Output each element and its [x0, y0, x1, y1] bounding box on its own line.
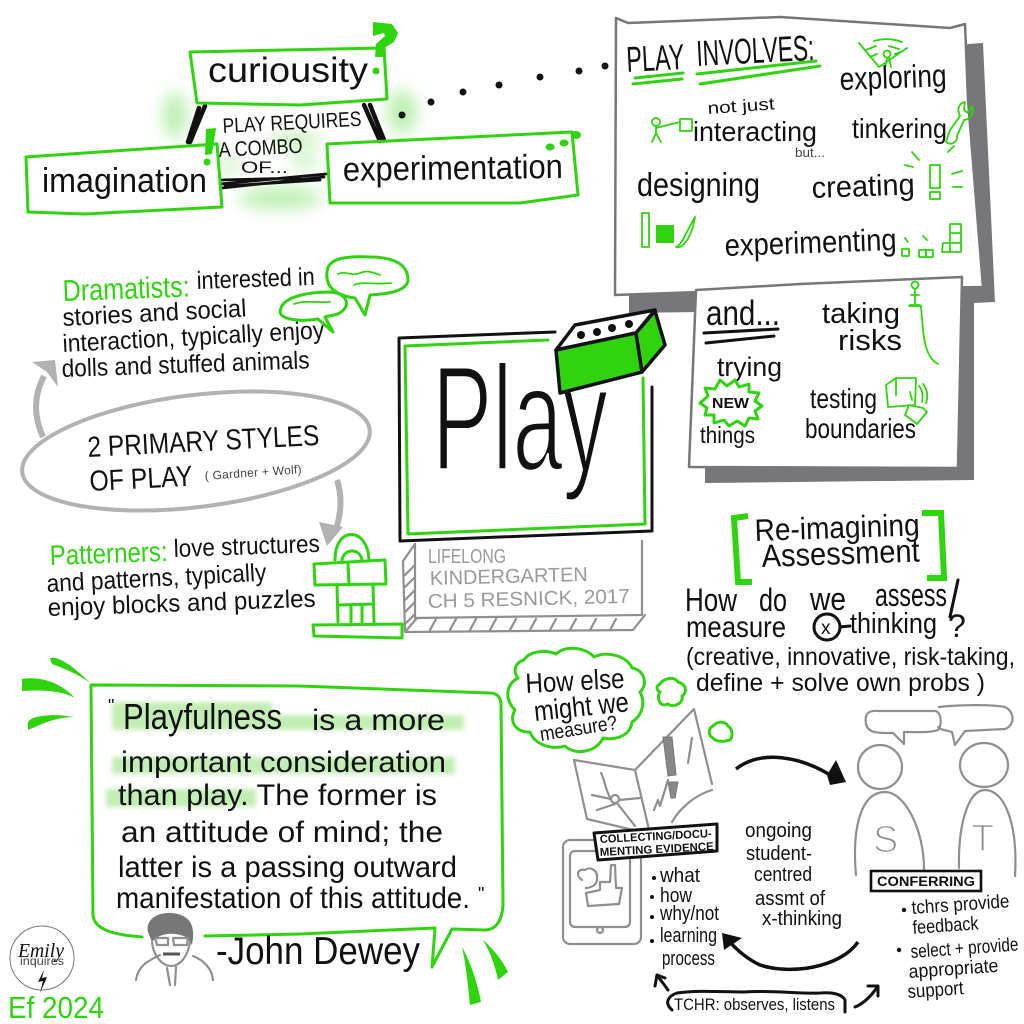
- label: collecting evidence: [594, 824, 717, 860]
- text: ongoing assessment: ongoing: [745, 820, 812, 842]
- text: ongoing assessment: student-: [746, 843, 812, 865]
- item: interacting: not just: [707, 94, 775, 118]
- highlights: [106, 702, 464, 807]
- quote text: latter is a passing outward: [118, 851, 457, 884]
- item: trying new things: trying: [717, 352, 782, 382]
- thought cloud: [508, 648, 732, 752]
- icon: dewey portrait: [136, 913, 213, 985]
- list: what how why: how: [660, 885, 692, 907]
- item: interacting: but...: [795, 145, 825, 160]
- heading: Re-imagining: [754, 507, 920, 548]
- item: testing boundaries: testing: [810, 383, 877, 414]
- panel: styles of play: [15, 257, 408, 638]
- arrow to patterners: [319, 480, 343, 546]
- quote text: an attitude of mind; the: [121, 816, 443, 849]
- item: interacting: interacting: [693, 116, 817, 147]
- text: ongoing assessment: x-thinking: [762, 908, 842, 930]
- item: taking risks: taking: [822, 298, 900, 330]
- panel: re-imagining assessment: [508, 507, 1019, 1014]
- speech bubble outline: [91, 685, 503, 967]
- question: define + solve own probs ): [696, 669, 985, 697]
- text: patterners: enjoy blocks and puzzles: [47, 585, 316, 622]
- panel: and...: [689, 277, 962, 468]
- item: testing boundaries: [805, 378, 927, 444]
- title: Play: Play: [432, 334, 608, 502]
- box: imagination: [26, 128, 222, 214]
- label: collecting evidence: COLLECTING/DOCU-: [600, 828, 712, 846]
- item: exploring: [839, 39, 947, 97]
- list: conferring: feedback: [912, 913, 980, 939]
- item: tinkering: tinkering: [852, 113, 947, 144]
- text: dramatists: Dramatists:: [62, 271, 190, 308]
- dotted link to play involves: [398, 62, 608, 118]
- item: interacting: [652, 94, 825, 160]
- thought cloud: measure?: [538, 712, 619, 746]
- list: what how why: learning: [660, 925, 717, 947]
- question: assess: [875, 577, 947, 613]
- heading: [734, 507, 944, 582]
- label: play requires a combo of: A COMBO: [218, 135, 303, 162]
- text: patterners: love structures: [173, 530, 320, 563]
- label: collecting evidence: MENTING EVIDENCE: [600, 841, 714, 859]
- text: ongoing assessment: assmt of: [755, 888, 825, 910]
- label: play requires a combo of: PLAY REQUIRES: [222, 108, 362, 138]
- item: and: and...: [706, 294, 780, 333]
- list: conferring: support: [907, 978, 965, 1003]
- quote text: [108, 696, 484, 915]
- question: measure: [686, 611, 786, 644]
- quote text: ": [108, 696, 114, 716]
- question: ?: [948, 608, 966, 644]
- attribution: john dewey: -John Dewey: [216, 930, 420, 973]
- item: creating: creating: [811, 168, 915, 205]
- item: testing boundaries: boundaries: [805, 413, 916, 444]
- icon: student and teacher: [855, 705, 1015, 876]
- icon: student and teacher: S: [873, 819, 898, 861]
- text: dramatists: interaction, typically enjoy: [62, 316, 325, 358]
- question: x: [821, 618, 831, 639]
- oval: 2 primary styles: [15, 374, 377, 528]
- quote text: ": [478, 884, 484, 904]
- panel sheet: [689, 277, 962, 468]
- list: conferring: [897, 891, 1019, 1003]
- thought cloud: How else: [525, 663, 625, 699]
- item: taking risks: [822, 282, 938, 364]
- icon: tablet: [563, 840, 641, 944]
- signature: ef 2024: Ef 2024: [8, 990, 104, 1024]
- list: what how why: why/not: [659, 903, 719, 925]
- item: experimenting: experimenting: [724, 222, 897, 263]
- question: we: [809, 581, 846, 617]
- arrow: to conferring: [736, 757, 846, 785]
- text: ongoing assessment: [745, 820, 842, 930]
- panel: book citation: CH 5 RESNICK, 2017: [428, 586, 630, 613]
- label: play requires a combo of: OF...: [241, 158, 288, 177]
- label: play requires a combo of: [218, 108, 362, 177]
- item: trying new things: NEW: [712, 395, 750, 412]
- item: designing: [637, 166, 760, 247]
- quote text: than play. The former is: [118, 779, 437, 812]
- arrow to dramatists: [32, 360, 58, 437]
- triangle connector bars: [188, 105, 384, 188]
- text: dramatists: stories and social: [62, 294, 247, 332]
- list: what how why: process: [662, 948, 715, 970]
- box: curiousity: curiousity: [208, 51, 369, 90]
- panel: john dewey quote: [8, 658, 508, 1024]
- logo: emily inquires: [10, 926, 74, 993]
- item: and: [704, 294, 780, 343]
- icon: green brick: [556, 310, 665, 393]
- note: teacher observes listens: [655, 975, 878, 1014]
- text: dramatists: [61, 263, 325, 383]
- panel: central play title: [399, 310, 665, 541]
- list: what how why: what: [659, 865, 700, 887]
- item: creating: [811, 146, 962, 205]
- icon: student and teacher: T: [971, 818, 994, 860]
- quote text: Playfulness: [123, 696, 282, 737]
- text: dramatists: dolls and stuffed animals: [61, 346, 310, 383]
- icon: speech bubbles: [280, 257, 408, 332]
- logo: emily inquires: Emily: [17, 940, 64, 962]
- box: imagination: imagination: [42, 162, 207, 200]
- list: conferring: appropriate: [908, 956, 999, 983]
- panel sheet: [615, 17, 983, 295]
- item: exploring: exploring: [839, 57, 947, 97]
- question: do: [759, 582, 787, 618]
- text: dramatists: interested in: [196, 263, 315, 295]
- panel: book citation: LIFELONG: [428, 546, 506, 568]
- text: patterners: and patterns, typically: [46, 558, 267, 598]
- panel shadow: [629, 43, 995, 483]
- rays: [22, 658, 508, 1005]
- panel: play requires a combo: [26, 22, 608, 214]
- note: teacher observes listens: TCHR: observes, listens: [674, 995, 835, 1014]
- item: trying new things: things: [700, 422, 755, 448]
- oval: 2 primary styles: ( Gardner + Wolf): [204, 462, 302, 483]
- icon: open notebook: [574, 709, 712, 834]
- question: [685, 577, 1015, 697]
- green glow behind triangle: [163, 90, 417, 209]
- arrow: to collecting: [722, 933, 858, 969]
- panel: book citation: [403, 541, 645, 632]
- logo: emily inquires: inquires: [20, 954, 64, 968]
- quote text: is a more: [312, 704, 445, 737]
- panel: book citation: KINDERGARTEN: [430, 564, 588, 590]
- text: patterners: [46, 530, 320, 622]
- frame: [399, 332, 652, 541]
- icon: block tower: [313, 534, 402, 638]
- quote text: manifestation of this attitude.: [116, 882, 470, 915]
- box: experimentation: experimentation: [343, 148, 563, 189]
- item: designing: designing: [637, 166, 760, 203]
- box: experimentation: [327, 131, 581, 203]
- label: conferring: CONFERRING: [877, 874, 975, 889]
- heading: play involves: INVOLVES:: [695, 27, 815, 74]
- item: taking risks: risks: [838, 325, 902, 357]
- box: curiousity: [190, 22, 398, 105]
- text: ongoing assessment: centred: [754, 864, 812, 886]
- quote text: important consideration: [121, 746, 446, 779]
- oval: 2 primary styles: OF PLAY: [89, 461, 193, 498]
- question: How: [685, 582, 738, 618]
- heading: play involves: PLAY: [625, 36, 685, 80]
- list: conferring: tchrs provide: [911, 891, 1010, 919]
- heading: Assessment: [761, 533, 920, 574]
- list: what how why: [650, 865, 719, 970]
- question: thinking: [850, 608, 937, 640]
- thought cloud: might we: [532, 686, 630, 727]
- item: tinkering: [852, 102, 973, 144]
- item: trying new things: [700, 352, 782, 448]
- panel: play involves: [615, 17, 995, 483]
- oval: 2 primary styles: 2 PRIMARY STYLES: [87, 420, 320, 464]
- heading: play involves: [625, 27, 820, 84]
- label: conferring: [871, 871, 981, 891]
- text: patterners: Patterners:: [49, 536, 168, 571]
